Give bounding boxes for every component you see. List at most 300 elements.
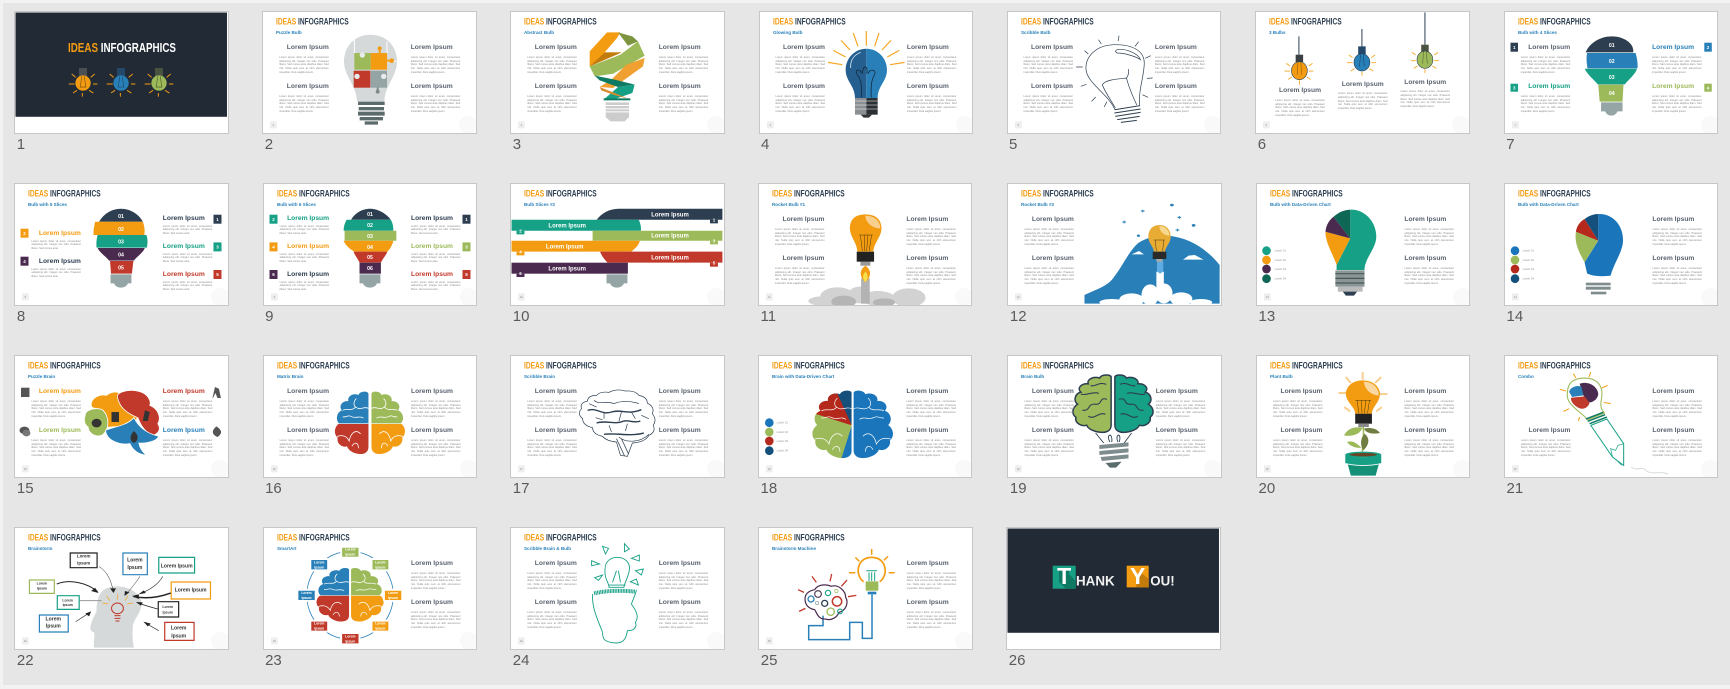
- page tab: [271, 294, 277, 301]
- page tab: [22, 294, 29, 301]
- text block: Lorem Ipsum: [163, 243, 205, 250]
- slice numbers: 05: [367, 255, 373, 261]
- page tab: [271, 638, 277, 645]
- text block: Lorem Ipsum: [1404, 216, 1446, 223]
- text block: Lorem Ipsum: [659, 599, 701, 606]
- text block: [1520, 44, 1570, 74]
- text block: [279, 44, 329, 74]
- text block: [1521, 427, 1570, 458]
- text block: Lorem Ipsum: [1404, 427, 1446, 434]
- thank you message: HANK: [1076, 573, 1115, 589]
- text block: [1024, 216, 1074, 246]
- page tab: 13: [1266, 295, 1269, 299]
- text block: [411, 215, 460, 235]
- text block: Lorem ipsum dolor sit amet, consectetur adipiscing elit. Integer nec odio. Praesent libero. Sed cursus ante.: [31, 268, 81, 278]
- title: IDEAS INFOGRAPHICS: [1270, 189, 1343, 199]
- text block: [411, 599, 460, 630]
- slide 1: cover: [14, 11, 229, 134]
- text block: Lorem Ipsum: [906, 427, 948, 434]
- box labels: Ipsum: [375, 566, 385, 570]
- icon: gear brain piped into bulb: [798, 549, 895, 640]
- text block: Lorem Ipsum: [535, 44, 577, 51]
- text block: Lorem ipsum dolor sit amet, consectetur adipiscing elit. Integer nec odio. Praesent libero. Sed cursus ante.: [31, 240, 81, 250]
- page tab: 21: [1514, 467, 1517, 471]
- slide number: 12: [1010, 308, 1027, 325]
- icon: four-colour brain: [335, 392, 405, 454]
- legend: Label 02: [1523, 258, 1534, 262]
- text block: Lorem ipsum dolor sit amet, consectetur adipiscing elit. Integer nec odio. Praesent libero. Sed cursus ante dapibus diam. Sed nisi. Nulla quis sem at nibh elementum imperdiet. Duis sagittis ipsum.: [1024, 400, 1074, 418]
- text block: Lorem Ipsum: [411, 215, 453, 222]
- slide number: 7: [1506, 136, 1515, 153]
- text block: Lorem ipsum dolor sit amet, consectetur adipiscing elit. Integer nec odio. Praesent libero. Sed cursus ante dapibus diam. Sed nisi. Nulla quis sem at nibh elementum imperdiet. Duis sagittis ipsum.: [1024, 228, 1074, 246]
- slide 2: puzzle bulb: [262, 11, 477, 134]
- slide number: 9: [265, 308, 273, 325]
- text block: Lorem ipsum dolor sit amet, consectetur adipiscing elit. Integer nec odio. Praesent libero. Sed cursus ante.: [280, 281, 329, 291]
- text block: Lorem ipsum dolor sit amet, consectetur adipiscing elit. Integer nec odio. Praesent libero. Sed cursus ante.: [280, 225, 329, 235]
- slide 20: plant bulb: [1256, 355, 1470, 478]
- title: IDEAS INFOGRAPHICS: [772, 189, 845, 199]
- slide number: 24: [513, 652, 529, 669]
- text block: [163, 388, 212, 418]
- box labels: Ipsum: [345, 553, 355, 557]
- text block: [906, 388, 956, 418]
- text block: Lorem ipsum dolor sit amet, consectetur adipiscing elit. Integer nec odio. Praesent libero. Sed cursus ante dapibus diam. Sed nisi. Nulla quis sem at nibh elementum imperdiet. Duis sagittis ipsum.: [1652, 439, 1702, 457]
- page tab: 14: [1514, 295, 1517, 299]
- slide 6: three hanging bulbs: [1255, 11, 1470, 134]
- page tab: [518, 294, 525, 301]
- legend: [765, 419, 788, 455]
- title: IDEAS INFOGRAPHICS: [277, 361, 349, 371]
- text block: Lorem Ipsum: [659, 560, 701, 567]
- text block: Lorem ipsum dolor sit amet, consectetur adipiscing elit. Integer nec odio. Praesent libero. Sed cursus ante dapibus diam. Sed nisi. Nulla quis sem at nibh elementum imperdiet. Duis sagittis ipsum.: [1652, 267, 1702, 285]
- number tabs: 6: [272, 272, 275, 277]
- text block: Lorem Ipsum: [907, 44, 949, 51]
- subtitle: Brain Bulb: [1021, 374, 1045, 379]
- number tabs: 1: [1513, 45, 1516, 50]
- text block: Lorem ipsum dolor sit amet, consectetur adipiscing elit. Integer nec odio. Praesent libero. Sed cursus ante dapibus diam. Sed nisi. Nulla quis sem at nibh elementum imperdiet. Duis sagittis ipsum.: [527, 56, 577, 74]
- text block: Lorem Ipsum: [411, 388, 453, 395]
- text block: Lorem ipsum dolor sit amet, consectetur adipiscing elit. Integer nec odio. Praesent libero. Sed cursus ante dapibus diam. Sed nisi. Nulla quis sem at nibh elementum imperdiet. Duis sagittis ipsum.: [280, 400, 329, 418]
- slide number: 21: [1506, 480, 1523, 497]
- box labels: Ipsum: [163, 611, 173, 615]
- box labels: Ipsum: [314, 566, 324, 570]
- text block: [1156, 388, 1205, 418]
- slide number: 13: [1258, 308, 1275, 325]
- box labels: Ipsum: [388, 596, 398, 600]
- page tab: [1263, 122, 1270, 129]
- ribbon labels: Lorem Ipsum: [651, 213, 689, 219]
- text block: Lorem ipsum dolor sit amet, consectetur adipiscing elit. Integer nec odio. Praesent libero. Sed cursus ante.: [163, 225, 212, 235]
- subtitle: Abstract Bulb: [524, 30, 555, 35]
- legend: [1262, 247, 1286, 283]
- text block: Lorem Ipsum: [287, 427, 329, 434]
- text block: Lorem ipsum dolor sit amet, consectetur adipiscing elit. Integer nec odio. Praesent libero. Sed cursus ante dapibus diam. Sed nisi. Nulla quis sem at nibh elementum imperdiet. Duis sagittis ipsum.: [1024, 56, 1073, 74]
- slide 8: bulb with 5 slices: [14, 183, 229, 306]
- slide 9: bulb with 6 slices: [263, 183, 477, 306]
- slice numbers: 01: [118, 214, 124, 220]
- text block: [1404, 388, 1454, 418]
- number tabs: 3: [465, 245, 468, 250]
- slice numbers: 03: [367, 234, 373, 240]
- slide 19: brain bulb: [1007, 355, 1222, 478]
- box labels: Lorem: [314, 561, 324, 565]
- page tab: [1512, 294, 1519, 301]
- text block: Lorem ipsum dolor sit amet, consectetur adipiscing elit. Integer nec odio. Praesent libero. Sed cursus ante dapibus diam. Sed nisi. Nulla quis sem at nibh elementum imperdiet. Duis sagittis ipsum.: [31, 400, 81, 418]
- ribbon labels: Lorem Ipsum: [546, 245, 584, 251]
- text block: Lorem Ipsum: [1031, 44, 1073, 51]
- text block: Lorem ipsum dolor sit amet, consectetur adipiscing elit. Integer nec odio. Praesent libero. Sed cursus ante.: [411, 225, 460, 235]
- page tab: [270, 122, 277, 129]
- slice numbers: 06: [367, 266, 373, 272]
- number tabs: 3: [1513, 86, 1516, 91]
- title: IDEAS INFOGRAPHICS: [1021, 17, 1093, 27]
- text block: Lorem ipsum dolor sit amet, consectetur adipiscing elit. Integer nec odio. Praesent libero. Sed cursus ante dapibus diam. Sed nisi. Nulla quis sem at nibh elementum imperdiet. Duis sagittis ipsum.: [906, 228, 956, 246]
- slide number: 26: [1009, 652, 1025, 669]
- slice numbers: [367, 212, 373, 272]
- subtitle: Brainstorm Machine: [772, 546, 817, 551]
- subtitle: Bulb with Data-Driven Chart: [1270, 202, 1331, 207]
- text block: Lorem ipsum dolor sit amet, consectetur adipiscing elit. Integer nec odio. Praesent libero. Sed cursus ante dapibus diam. Sed nisi. Nulla quis sem at nibh elementum imperdiet. Duis sagittis ipsum.: [527, 611, 577, 629]
- title: IDEAS INFOGRAPHICS: [1021, 361, 1094, 371]
- box labels: Ipsum: [63, 603, 73, 607]
- box labels: Lorem: [345, 548, 355, 552]
- text block: Lorem ipsum dolor sit amet, consectetur adipiscing elit. Integer nec odio. Praesent libero. Sed cursus ante dapibus diam. Sed nisi. Nulla quis sem at nibh elementum imperdiet. Duis sagittis ipsum.: [1024, 95, 1073, 113]
- text block: [776, 83, 825, 113]
- number tabs: 1: [465, 217, 468, 222]
- text block: [1652, 427, 1702, 458]
- text block: [527, 83, 577, 113]
- slide 4: glowing bulb: [758, 11, 973, 134]
- icon: 5-slice bulb: [94, 209, 148, 288]
- box labels: Lorem: [301, 591, 311, 595]
- text block: Lorem ipsum dolor sit amet, consectetur adipiscing elit. Integer nec odio. Praesent libero. Sed cursus ante dapibus diam. Sed nisi. Nulla quis sem at nibh elementum imperdiet. Duis sagittis ipsum.: [411, 439, 460, 457]
- slide number: 19: [1010, 480, 1027, 497]
- number tabs: 5: [217, 272, 220, 277]
- legend: Label 04: [1523, 277, 1534, 281]
- slide 11: rocket bulb 1: [758, 183, 972, 306]
- page tab: 10: [520, 295, 524, 299]
- number tabs: [1510, 43, 1711, 92]
- legend: Label 03: [1275, 267, 1286, 271]
- icon: brain bulb: [1073, 375, 1153, 468]
- title: IDEAS INFOGRAPHICS: [772, 533, 845, 543]
- ribbon numbers: 5: [713, 261, 716, 266]
- text block: Lorem Ipsum: [1652, 388, 1694, 395]
- text block: [162, 243, 212, 263]
- number tabs: 1: [217, 217, 220, 222]
- slice numbers: 01: [1609, 43, 1614, 49]
- ribbon numbers: [520, 218, 716, 276]
- slide number: 4: [761, 136, 769, 153]
- text block: Lorem ipsum dolor sit amet, consectetur adipiscing elit. Integer nec odio. Praesent libero. Sed cursus ante dapibus diam. Sed nisi. Nulla quis sem at nibh elementum imperdiet. Duis sagittis ipsum.: [775, 228, 824, 246]
- text block: [1155, 83, 1204, 113]
- slice numbers: [118, 214, 124, 272]
- text block: Lorem ipsum dolor sit amet, consectetur adipiscing elit. Integer nec odio. Praesent libero. Sed cursus ante dapibus diam. Sed nisi. Nulla quis sem at nibh elementum imperdiet. Duis sagittis ipsum.: [163, 439, 212, 457]
- slice numbers: 03: [1609, 75, 1614, 81]
- text block: Lorem ipsum dolor sit amet, consectetur adipiscing elit. Integer nec odio. Praesent libero. Sed cursus ante dapibus diam. Sed nisi. Nulla quis sem at nibh elementum imperdiet. Duis sagittis ipsum.: [1521, 56, 1570, 74]
- box labels: Lorem: [171, 626, 187, 632]
- text block: [1400, 79, 1450, 108]
- text block: Lorem ipsum dolor sit amet, consectetur adipiscing elit. Integer nec odio. Praesent libero. Sed cursus ante dapibus diam. Sed nisi. Nulla quis sem at nibh elementum imperdiet. Duis sagittis ipsum.: [1024, 267, 1074, 285]
- page tab: [766, 638, 773, 645]
- subtitle: Plant Bulb: [1270, 374, 1293, 379]
- text block: Lorem ipsum dolor sit amet, consectetur adipiscing elit. Integer nec odio. Praesent libero. Sed cursus ante dapibus diam. Sed nisi. Nulla quis sem at nibh elementum imperdiet. Duis sagittis ipsum.: [776, 95, 825, 113]
- box labels: Ipsum: [37, 587, 47, 591]
- text block: Lorem ipsum dolor sit amet, consectetur adipiscing elit. Integer nec odio. Praesent libero. Sed cursus ante dapibus diam. Sed nisi. Nulla quis sem at nibh elementum imperdiet. Duis sagittis ipsum.: [1273, 400, 1322, 418]
- subtitle: SmartArt: [277, 546, 297, 551]
- text block: Lorem Ipsum: [535, 427, 577, 434]
- text block: [1520, 83, 1570, 113]
- text block: Lorem ipsum dolor sit amet, consectetur adipiscing elit. Integer nec odio. Praesent libero. Sed cursus ante.: [163, 253, 212, 263]
- text block: Lorem ipsum dolor sit amet, consectetur adipiscing elit. Integer nec odio. Praesent libero. Sed cursus ante dapibus diam. Sed nisi. Nulla quis sem at nibh elementum imperdiet. Duis sagittis ipsum.: [411, 400, 460, 418]
- title: IDEAS INFOGRAPHICS: [28, 189, 101, 199]
- page tab: [518, 122, 525, 129]
- page tab: [766, 466, 773, 473]
- title: IDEAS INFOGRAPHICS: [1518, 17, 1590, 27]
- subtitle: Bulb with Data-Driven Chart: [1518, 202, 1579, 207]
- icons: three glowing bulbs: [69, 68, 174, 97]
- ribbon labels: Lorem Ipsum: [651, 234, 689, 240]
- text block: Lorem Ipsum: [906, 216, 948, 223]
- subtitle: Scribble Brain & Bulb: [524, 546, 572, 551]
- text block: Lorem ipsum dolor sit amet, consectetur adipiscing elit. Integer nec odio. Praesent libero. Sed cursus ante dapibus diam. Sed nisi. Nulla quis sem at nibh elementum imperdiet. Duis sagittis ipsum.: [280, 439, 329, 457]
- slide 15: puzzle brain: [14, 355, 229, 478]
- subtitle: Brain with Data-Driven Chart: [772, 374, 835, 379]
- text block: Lorem Ipsum: [1280, 388, 1322, 395]
- text block: Lorem ipsum dolor sit amet, consectetur adipiscing elit. Integer nec odio. Praesent libero. Sed cursus ante dapibus diam. Sed nisi. Nulla quis sem at nibh elementum imperdiet. Duis sagittis ipsum.: [659, 439, 708, 457]
- text block: Lorem Ipsum: [1528, 83, 1570, 90]
- icon: rocket bulb over blue hill: [1085, 204, 1220, 307]
- text block: Lorem ipsum dolor sit amet, consectetur adipiscing elit. Integer nec odio. Praesent libero. Sed cursus ante dapibus diam. Sed nisi. Nulla quis sem at nibh elementum imperdiet. Duis sagittis ipsum.: [775, 267, 824, 285]
- text block: [775, 216, 824, 246]
- text block: [1338, 81, 1388, 110]
- page tab: 23: [272, 639, 276, 643]
- text block: [411, 560, 460, 590]
- text block: Lorem ipsum dolor sit amet, consectetur adipiscing elit. Integer nec odio. Praesent libero. Sed cursus ante dapibus diam. Sed nisi. Nulla quis sem at nibh elementum imperdiet. Duis sagittis ipsum.: [527, 572, 577, 590]
- text block: Lorem ipsum dolor sit amet, consectetur adipiscing elit. Integer nec odio. Praesent libero. Sed cursus ante dapibus diam. Sed nisi. Nulla quis sem at nibh elementum imperdiet. Duis sagittis ipsum.: [1404, 267, 1454, 285]
- number tabs: 3: [217, 245, 220, 250]
- text block: Lorem Ipsum: [1528, 427, 1570, 434]
- diagram: head with arrows and boxes: [30, 553, 211, 648]
- text block: [31, 258, 81, 278]
- box labels: Lorem: [375, 622, 385, 626]
- slice numbers: 02: [118, 227, 124, 233]
- text block: [31, 230, 81, 250]
- box labels: Ipsum: [172, 634, 187, 640]
- page tab: 20: [1266, 467, 1269, 471]
- text block: [1652, 44, 1702, 74]
- subtitle: 3 Bulbs: [1269, 30, 1286, 35]
- text block: Lorem Ipsum: [1032, 216, 1074, 223]
- text block: Lorem ipsum dolor sit amet, consectetur adipiscing elit. Integer nec odio. Praesent libero. Sed cursus ante dapibus diam. Sed nisi. Nulla quis sem at nibh elementum imperdiet. Duis sagittis ipsum.: [527, 95, 577, 113]
- box labels: Lorem Ipsum: [161, 564, 194, 570]
- text block: Lorem ipsum dolor sit amet, consectetur adipiscing elit. Integer nec odio. Praesent libero. Sed cursus ante dapibus diam. Sed nisi. Nulla quis sem at nibh elementum imperdiet. Duis sagittis ipsum.: [1024, 439, 1074, 457]
- text block: Lorem Ipsum: [1032, 255, 1074, 262]
- text block: Lorem ipsum dolor sit amet, consectetur adipiscing elit. Integer nec odio. Praesent libero. Sed cursus ante dapibus diam. Sed nisi. Nulla quis sem at nibh elementum imperdiet. Duis sagittis ipsum.: [1275, 99, 1325, 117]
- number tabs: 4: [24, 259, 27, 264]
- title: IDEAS INFOGRAPHICS: [276, 17, 349, 27]
- text block: Lorem ipsum dolor sit amet, consectetur adipiscing elit. Integer nec odio. Praesent libero. Sed cursus ante dapibus diam. Sed nisi. Nulla quis sem at nibh elementum imperdiet. Duis sagittis ipsum.: [1404, 439, 1454, 457]
- box labels: Lorem: [63, 599, 73, 603]
- page tab: [1512, 122, 1518, 129]
- icon: glowing bulb: [827, 31, 904, 118]
- page tab: [766, 294, 773, 301]
- page tab: [271, 466, 277, 473]
- subtitle: Bulb Slices #2: [524, 202, 556, 207]
- page tab: [1264, 294, 1271, 301]
- text block: [527, 599, 577, 630]
- page tab: 18: [768, 467, 771, 471]
- ribbon numbers: 4: [520, 250, 523, 255]
- text block: Lorem Ipsum: [411, 599, 453, 606]
- text block: Lorem ipsum dolor sit amet, consectetur adipiscing elit. Integer nec odio. Praesent libero. Sed cursus ante dapibus diam. Sed nisi. Nulla quis sem at nibh elementum imperdiet. Duis sagittis ipsum.: [1521, 95, 1570, 113]
- text block: Lorem ipsum dolor sit amet, consectetur adipiscing elit. Integer nec odio. Praesent libero. Sed cursus ante dapibus diam. Sed nisi. Nulla quis sem at nibh elementum imperdiet. Duis sagittis ipsum.: [1400, 90, 1450, 108]
- slide number: 22: [17, 652, 34, 669]
- slide number: 18: [760, 480, 777, 497]
- text block: [1404, 255, 1454, 286]
- slide 26: thank you: [1006, 527, 1221, 650]
- page tab: 12: [1017, 295, 1021, 299]
- subtitle: Puzzle Bulb: [276, 30, 302, 35]
- page tab: 11: [768, 295, 771, 299]
- text block: [907, 599, 956, 630]
- page tab: 17: [520, 467, 524, 471]
- text block: Lorem ipsum dolor sit amet, consectetur adipiscing elit. Integer nec odio. Praesent libero. Sed cursus ante dapibus diam. Sed nisi. Nulla quis sem at nibh elementum imperdiet. Duis sagittis ipsum.: [907, 95, 956, 113]
- text block: Lorem Ipsum: [163, 271, 205, 278]
- text block: [659, 560, 708, 590]
- page tab: 3: [521, 123, 523, 127]
- number tabs: [269, 215, 470, 279]
- text block: [527, 427, 577, 458]
- subtitle: Combo: [1518, 374, 1534, 379]
- text block: Lorem ipsum dolor sit amet, consectetur adipiscing elit. Integer nec odio. Praesent libero. Sed cursus ante dapibus diam. Sed nisi. Nulla quis sem at nibh elementum imperdiet. Duis sagittis ipsum.: [906, 267, 956, 285]
- text block: Lorem Ipsum: [287, 83, 329, 90]
- text block: [279, 83, 329, 113]
- subtitle: Rocket Bulb #1: [772, 202, 806, 207]
- text block: Lorem ipsum dolor sit amet, consectetur adipiscing elit. Integer nec odio. Praesent libero. Sed cursus ante dapibus diam. Sed nisi. Nulla quis sem at nibh elementum imperdiet. Duis sagittis ipsum.: [1652, 56, 1702, 74]
- chart: ribbon bulb: [512, 209, 723, 288]
- diagram: brain with ring of boxes: [297, 547, 402, 645]
- number tabs: [21, 215, 222, 279]
- box labels: Lorem Ipsum: [175, 588, 207, 594]
- legend: Label 01: [777, 421, 788, 425]
- text block: Lorem ipsum dolor sit amet, consectetur adipiscing elit. Integer nec odio. Praesent libero. Sed cursus ante dapibus diam. Sed nisi. Nulla quis sem at nibh elementum imperdiet. Duis sagittis ipsum.: [907, 56, 956, 74]
- text block: [411, 427, 460, 458]
- title: IDEAS INFOGRAPHICS: [524, 361, 597, 371]
- subtitle: Scribble Brain: [524, 374, 556, 379]
- page tab: 2: [273, 123, 275, 127]
- ribbon numbers: 1: [713, 218, 716, 223]
- text block: Lorem Ipsum: [39, 230, 81, 237]
- slide 16: matrix brain: [263, 355, 477, 478]
- legend: Label 03: [777, 439, 788, 443]
- text block: [411, 243, 460, 263]
- text block: Lorem ipsum dolor sit amet, consectetur adipiscing elit. Integer nec odio. Praesent libero. Sed cursus ante.: [411, 253, 460, 263]
- text block: [280, 427, 329, 458]
- text block: Lorem ipsum dolor sit amet, consectetur adipiscing elit. Integer nec odio. Praesent libero. Sed cursus ante dapibus diam. Sed nisi. Nulla quis sem at nibh elementum imperdiet. Duis sagittis ipsum.: [907, 611, 956, 629]
- text block: Lorem Ipsum: [1652, 216, 1694, 223]
- title: IDEAS INFOGRAPHICS: [277, 533, 349, 543]
- text block: Lorem Ipsum: [659, 44, 701, 51]
- text block: Lorem Ipsum: [411, 243, 453, 250]
- text block: [163, 427, 212, 458]
- title: IDEAS INFOGRAPHICS: [773, 17, 845, 27]
- subtitle: Rocket Bulb #2: [1021, 202, 1055, 207]
- text block: Lorem Ipsum: [535, 388, 577, 395]
- icon: puzzle bulb: [344, 35, 397, 125]
- box labels: Lorem: [314, 622, 324, 626]
- page tab: [518, 466, 525, 473]
- box labels: Ipsum: [46, 624, 62, 630]
- text block: [907, 560, 956, 590]
- box labels: Ipsum: [77, 561, 91, 566]
- text block: [1404, 216, 1454, 246]
- box labels: Lorem: [345, 635, 355, 639]
- text block: Lorem ipsum dolor sit amet, consectetur adipiscing elit. Integer nec odio. Praesent libero. Sed cursus ante dapibus diam. Sed nisi. Nulla quis sem at nibh elementum imperdiet. Duis sagittis ipsum.: [411, 56, 460, 74]
- text block: [410, 83, 460, 113]
- ribbon numbers: 2: [520, 229, 523, 234]
- slide 24: scribble brain and bulb: [510, 527, 725, 650]
- page tab: 16: [272, 467, 276, 471]
- text block: Lorem Ipsum: [39, 427, 81, 434]
- legend: Label 04: [1275, 277, 1286, 281]
- text block: [1024, 255, 1074, 285]
- box labels: Lorem: [37, 582, 48, 586]
- text block: [659, 599, 708, 630]
- text block: Lorem Ipsum: [1032, 427, 1074, 434]
- text block: Lorem ipsum dolor sit amet, consectetur adipiscing elit. Integer nec odio. Praesent libero. Sed cursus ante dapibus diam. Sed nisi. Nulla quis sem at nibh elementum imperdiet. Duis sagittis ipsum.: [527, 400, 577, 418]
- slide 13: bulb with data-driven chart: [1256, 183, 1470, 306]
- box labels: Lorem: [163, 605, 173, 609]
- page tab: 8: [25, 295, 27, 299]
- subtitle: Bulb with 5 Slices: [28, 202, 68, 207]
- text block: [1652, 216, 1702, 246]
- text block: [1652, 388, 1702, 418]
- text block: Lorem Ipsum: [411, 427, 453, 434]
- text block: Lorem ipsum dolor sit amet, consectetur adipiscing elit. Integer nec odio. Praesent libero. Sed cursus ante dapibus diam. Sed nisi. Nulla quis sem at nibh elementum imperdiet. Duis sagittis ipsum.: [1652, 400, 1702, 418]
- subtitle: Puzzle Brain: [28, 374, 56, 379]
- page tab: 25: [768, 639, 772, 643]
- ribbon numbers: 3: [713, 239, 716, 244]
- text block: Lorem Ipsum: [163, 215, 205, 222]
- legend: Label 01: [1275, 249, 1286, 253]
- text block: Lorem Ipsum: [1404, 255, 1446, 262]
- text block: Lorem ipsum dolor sit amet, consectetur adipiscing elit. Integer nec odio. Praesent libero. Sed cursus ante dapibus diam. Sed nisi. Nulla quis sem at nibh elementum imperdiet. Duis sagittis ipsum.: [411, 572, 460, 590]
- ribbon numbers: 6: [520, 271, 523, 276]
- icon: puzzle brain: [20, 387, 221, 456]
- number tabs: 2: [1706, 45, 1709, 50]
- text block: Lorem Ipsum: [1528, 44, 1570, 51]
- slide 5: scribble bulb: [1006, 11, 1221, 134]
- slide number: 15: [17, 480, 34, 497]
- text block: Lorem Ipsum: [163, 388, 205, 395]
- text block: [280, 215, 330, 235]
- slide 22: brainstorm: [14, 527, 229, 650]
- page tab: [22, 638, 29, 645]
- text block: Lorem ipsum dolor sit amet, consectetur adipiscing elit. Integer nec odio. Praesent libero. Sed cursus ante dapibus diam. Sed nisi. Nulla quis sem at nibh elementum imperdiet. Duis sagittis ipsum.: [411, 95, 460, 113]
- page tab: [1015, 466, 1022, 473]
- icons: three hanging bulbs: [1285, 13, 1439, 85]
- text block: [527, 44, 577, 74]
- page tab: 7: [1514, 123, 1516, 127]
- text block: Lorem ipsum dolor sit amet, consectetur adipiscing elit. Integer nec odio. Praesent libero. Sed cursus ante dapibus diam. Sed nisi. Nulla quis sem at nibh elementum imperdiet. Duis sagittis ipsum.: [1155, 56, 1204, 74]
- icon: 4-slice bulb: [1584, 37, 1637, 116]
- slice numbers: [1609, 43, 1614, 97]
- text block: [775, 255, 824, 285]
- slice numbers: 04: [118, 253, 124, 259]
- icon: bulb pencil with brain: [1560, 372, 1668, 475]
- number tabs: 4: [272, 245, 275, 250]
